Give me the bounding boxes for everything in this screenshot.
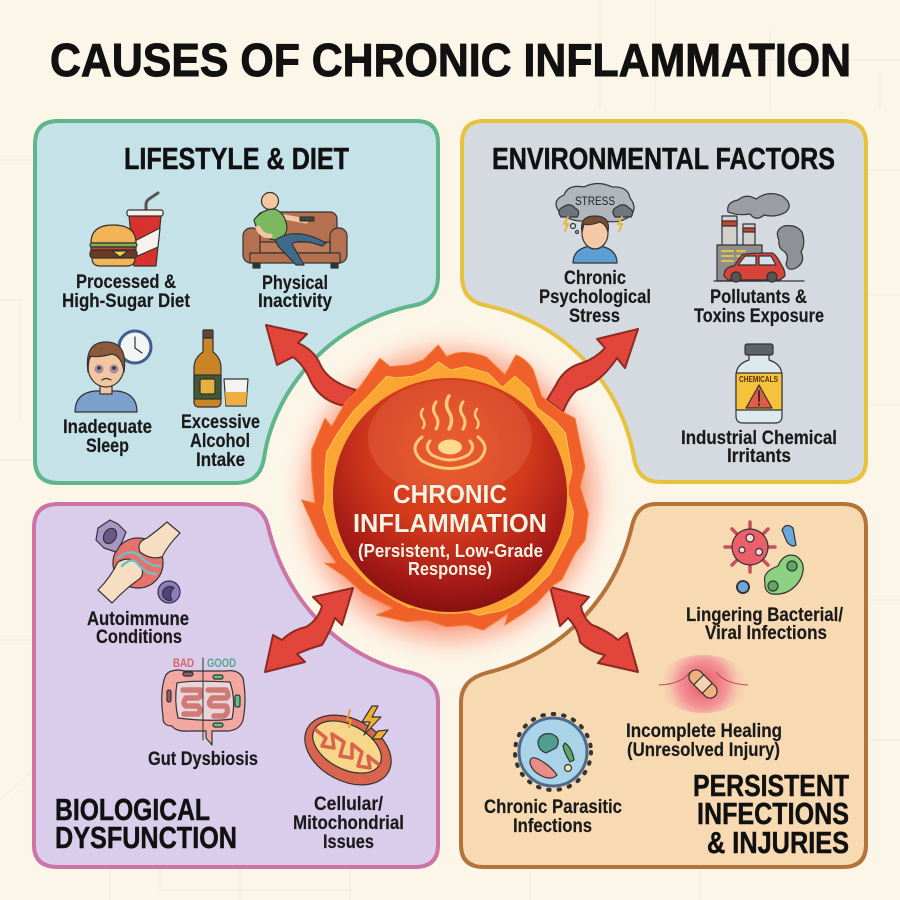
label: autoimmune conditions: Conditions (96, 627, 182, 648)
label: lingering bacterial viral infections: Lingering Bacterial/ (686, 605, 844, 626)
flame ring (302, 345, 588, 630)
good marker: GOOD (207, 656, 236, 670)
icon: alcohol bottle and glass (194, 330, 248, 407)
title: CAUSES OF CHRONIC INFLAMMATION (50, 34, 851, 86)
label: chronic psychological stress (539, 268, 651, 327)
icon: chemicals bottle (736, 344, 782, 423)
sphere title (353, 479, 547, 538)
arrow: to biological (265, 588, 353, 672)
central glow (278, 323, 622, 667)
heading: persistent infections and injuries: & INJURIES (707, 825, 849, 860)
heading: persistent infections and injuries: PERSISTENT (693, 768, 849, 803)
icon: heat waves and rings (415, 396, 485, 468)
icon: person on couch (243, 192, 347, 268)
label: inadequate sleep: Inadequate (63, 417, 152, 438)
label: excessive alcohol intake: Intake (196, 450, 245, 471)
label: gut dysbiosis: Gut Dysbiosis (148, 749, 258, 770)
label: excessive alcohol intake: Excessive (181, 412, 260, 433)
panel shape: lifestyle (35, 121, 438, 483)
label: incomplete healing unresolved injury (626, 721, 782, 761)
sphere highlight (368, 380, 532, 496)
panel shape: environmental (462, 121, 866, 482)
label: chronic parasitic infections: Infections (513, 816, 592, 837)
label: autoimmune conditions (87, 609, 189, 648)
panel: environmental factors (462, 121, 866, 482)
icon: stressed person under cloud (556, 184, 634, 263)
heading: biological dysfunction (55, 792, 237, 855)
icon: mitochondrion with lightning (293, 701, 403, 799)
label: cellular mitochondrial issues: Mitochondrial (293, 813, 404, 834)
inner flames (323, 362, 573, 615)
arrow: to persistent (550, 587, 638, 672)
label: cellular mitochondrial issues: Issues (323, 832, 374, 853)
label: pollutants and toxins exposure: Pollutants & (710, 287, 807, 308)
icon: gut with bad and good bacteria (162, 656, 245, 745)
label: lingering bacterial viral infections (686, 605, 844, 644)
label: cellular mitochondrial issues (293, 794, 404, 853)
label: chronic psychological stress: Stress (569, 306, 620, 327)
sphere subtitle (358, 541, 543, 579)
label: incomplete healing unresolved injury: Incomplete Healing (626, 721, 782, 742)
label: industrial chemical irritants (681, 428, 837, 467)
label: physical inactivity: Inactivity (258, 291, 332, 312)
label: excessive alcohol intake (181, 412, 260, 471)
sphere subtitle: Response) (408, 559, 492, 579)
icon: burger and soda (90, 193, 163, 266)
heading: biological dysfunction: DYSFUNCTION (55, 820, 237, 855)
panel: biological dysfunction (34, 504, 438, 867)
panel shape: biological (34, 504, 438, 867)
label: excessive alcohol intake: Alcohol (190, 431, 250, 452)
sphere body (332, 377, 568, 613)
label: pollutants and toxins exposure (694, 287, 824, 327)
label: industrial chemical irritants: Irritants (727, 446, 791, 467)
label: inadequate sleep (63, 417, 152, 457)
sphere: chronic inflammation (332, 377, 568, 613)
arrow: to environmental (547, 329, 638, 412)
label: processed and high-sugar diet: High-Sugar Diet (62, 291, 191, 312)
panel: lifestyle and diet (35, 121, 438, 483)
icon: wound with bandage (658, 655, 748, 713)
arrow: to lifestyle (266, 325, 356, 406)
label: chronic parasitic infections: Chronic Parasitic (484, 797, 622, 818)
label: chronic psychological stress: Psychological (539, 287, 651, 308)
icon: tired person and clock (75, 331, 151, 412)
icon: factory and car with smoke (714, 194, 804, 282)
sphere title: INFLAMMATION (353, 508, 547, 538)
icon: virus and bacteria (725, 522, 803, 594)
stress cloud text: STRESS (575, 194, 615, 208)
heading: persistent infections and injuries: INFECTIONS (697, 796, 849, 831)
label: lingering bacterial viral infections: Viral Infections (705, 623, 827, 644)
icon: inflamed joint and immune cells (96, 520, 180, 603)
label: autoimmune conditions: Autoimmune (87, 609, 189, 630)
label: inadequate sleep: Sleep (86, 436, 129, 457)
label: chronic psychological stress: Chronic (564, 268, 626, 289)
chemicals label text: CHEMICALS (739, 375, 779, 384)
label: chronic parasitic infections (484, 797, 622, 837)
label: physical inactivity (258, 273, 332, 312)
heading: persistent infections and injuries (693, 768, 849, 860)
icon: parasite cell (515, 714, 591, 790)
panel: persistent infections and injuries (461, 504, 866, 867)
label: pollutants and toxins exposure: Toxins Exposure (694, 306, 824, 327)
label: physical inactivity: Physical (262, 273, 328, 294)
label: processed and high-sugar diet (62, 272, 191, 312)
label: processed and high-sugar diet: Processed & (76, 272, 176, 293)
label: incomplete healing unresolved injury: (Unresolved Injury) (627, 740, 780, 761)
label: industrial chemical irritants: Industrial Chemical (681, 428, 837, 449)
sphere title: CHRONIC (393, 479, 507, 509)
label: cellular mitochondrial issues: Cellular/ (314, 794, 384, 815)
outer flames (302, 345, 588, 630)
sphere subtitle: (Persistent, Low-Grade (358, 541, 543, 561)
bad marker: BAD (173, 656, 194, 670)
heading: biological dysfunction: BIOLOGICAL (55, 792, 210, 827)
panel shape: persistent (461, 504, 866, 867)
heading: lifestyle and diet: LIFESTYLE & DIET (124, 141, 349, 176)
